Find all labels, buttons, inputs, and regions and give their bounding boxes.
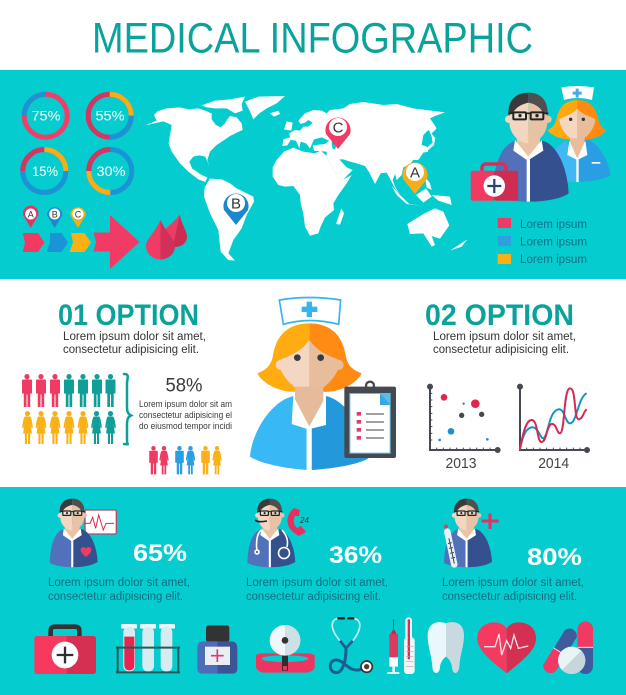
brace: [124, 374, 131, 444]
doctor 2 text: [246, 577, 388, 603]
thermometer: [443, 524, 458, 568]
stat description: do eiusmod tempor incidi: [139, 421, 232, 431]
caspian sea: [332, 137, 336, 149]
donut: 30%: 30%: [96, 163, 126, 179]
drop: large: [146, 220, 175, 260]
line chart 2014: [517, 384, 590, 453]
58% stat: 58%: [166, 376, 203, 396]
legend item: pink: Lorem ipsum: [520, 219, 587, 231]
doctor 1 with heart monitor: [50, 499, 116, 567]
iceland: [270, 111, 280, 117]
chevron: pink: [23, 233, 44, 252]
doctor: [493, 93, 569, 202]
new zealand: [450, 239, 467, 251]
africa: [273, 148, 352, 236]
donut: 75%: 75%: [32, 108, 60, 124]
big arrow: [94, 215, 140, 269]
80% stat: 80%: [527, 544, 582, 571]
pin A on map: A: [410, 164, 420, 182]
option 1 text: [63, 331, 206, 356]
madagascar: [336, 208, 344, 225]
pin C on map: C: [333, 120, 344, 136]
option 2 text: Lorem ipsum dolor sit amet,: [433, 331, 576, 343]
south america: [204, 179, 254, 261]
legend item: yellow: Lorem ipsum: [520, 254, 587, 266]
stethoscope: [255, 530, 290, 558]
nurse body: [250, 396, 368, 470]
icon: head mirror: [256, 625, 315, 673]
central nurse: [250, 297, 396, 470]
option 1 text: consectetur adipisicing elit.: [63, 344, 199, 356]
nurse cap: [279, 297, 341, 324]
doctor 3 text: Lorem ipsum dolor sit amet,: [442, 577, 584, 589]
option 2 heading: 02 OPTION: [425, 299, 574, 332]
pin B: B: [52, 210, 58, 220]
stat description: consectetur adipisicing el: [139, 410, 232, 420]
donut: 55%: 55%: [96, 108, 124, 124]
icon: tooth: [428, 622, 464, 673]
option 2 text: consectetur adipisicing elit.: [433, 344, 569, 356]
north america: [145, 107, 243, 182]
uk: [284, 121, 293, 131]
scatter chart 2013: [427, 384, 501, 453]
donut: 15%: 15%: [32, 163, 58, 179]
icon: syringe: [387, 619, 399, 674]
legend: [498, 218, 587, 266]
heart badge: [81, 547, 91, 557]
philippines: [425, 177, 432, 190]
japan: [423, 131, 435, 152]
staff illustration top right: [493, 86, 611, 202]
blood drops: [146, 212, 191, 260]
doctor 1 text: [48, 577, 190, 603]
pin A on map: [402, 163, 428, 194]
people pictogram: men row: [22, 374, 116, 407]
pin C on map: [325, 118, 351, 149]
icon: heart with pulse: [477, 622, 536, 673]
24 label: 24: [299, 516, 309, 525]
nurse hair: [257, 323, 362, 392]
bottom icons row A: [34, 624, 315, 674]
donut charts: [23, 94, 132, 192]
stat description: [139, 399, 232, 431]
greenland: [245, 96, 285, 119]
icon: pills: [543, 622, 593, 674]
pin C: C: [75, 210, 82, 220]
chevron arrows: [23, 233, 91, 252]
people pictogram: women row: [22, 411, 116, 444]
world map: [145, 96, 467, 261]
nurse collar: [292, 396, 326, 429]
doctor 2 text: Lorem ipsum dolor sit amet,: [246, 577, 388, 589]
pin B on map: B: [231, 196, 241, 212]
option 1 text: Lorem ipsum dolor sit amet,: [63, 331, 206, 343]
clipboard: [344, 382, 396, 458]
label 2014: 2014: [538, 455, 569, 472]
icon: stethoscope: [330, 618, 372, 673]
first aid kit top right: [471, 164, 518, 201]
drop: small: [161, 212, 191, 249]
pin B on map: [223, 194, 249, 225]
icon: thermometer: [404, 617, 415, 674]
small people pictogram: [149, 446, 222, 474]
legend item: blue: Lorem ipsum: [520, 236, 587, 248]
icon: test tubes: [116, 624, 180, 673]
doctor 3 text: consectetur adipisicing elit.: [442, 591, 577, 603]
chevron: yellow: [70, 233, 91, 252]
plus sign: [482, 514, 498, 528]
option 2 text: [433, 331, 576, 356]
monitor: [85, 510, 116, 534]
panel: top map band: [0, 70, 626, 279]
doctor 2 with stethoscope and phone: [247, 499, 309, 567]
icon: medicine bottle: [197, 625, 237, 674]
pin A: A: [28, 210, 34, 220]
canadian islands: [202, 97, 245, 113]
sumatra and java: [392, 186, 423, 206]
doctor 3 with thermometer: [443, 499, 498, 568]
eurasia: [282, 102, 445, 195]
label 2013: 2013: [446, 455, 476, 472]
36% stat: 36%: [329, 542, 382, 569]
nurse: [548, 86, 611, 182]
borneo: [416, 188, 432, 203]
title: MEDICAL INFOGRAPHIC: [92, 15, 533, 63]
stat description: Lorem ipsum dolor sit am: [139, 399, 232, 409]
nurse face: [276, 340, 344, 427]
doctor 3 text: [442, 577, 584, 603]
doctor 1 text: Lorem ipsum dolor sit amet,: [48, 577, 190, 589]
panel: bottom band: [0, 487, 626, 695]
bottom icons row B: [330, 617, 593, 674]
papua: [432, 195, 452, 205]
doctor 1 text: consectetur adipisicing elit.: [48, 591, 183, 603]
option 1 heading: 01 OPTION: [58, 299, 199, 332]
australia: [407, 208, 449, 247]
phone: [287, 508, 306, 536]
65% stat: 65%: [133, 540, 187, 567]
icon: first aid kit: [34, 627, 96, 674]
chevron: blue: [46, 233, 68, 252]
doctor 2 text: consectetur adipisicing elit.: [246, 591, 381, 603]
headset: [255, 520, 267, 522]
small location pins A B C: [23, 206, 86, 228]
